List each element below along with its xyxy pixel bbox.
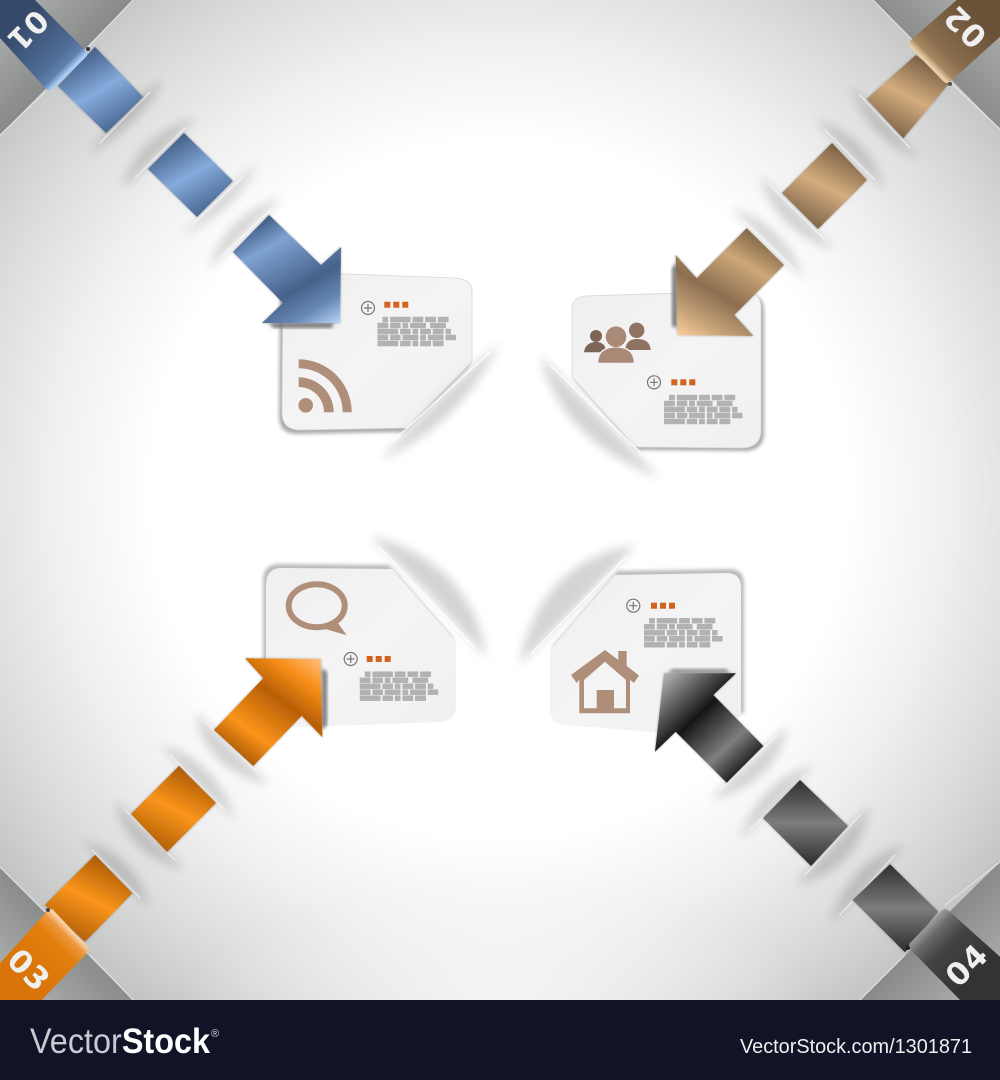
logo: registered mark: ® xyxy=(211,1028,219,1040)
ribbon segment xyxy=(131,766,216,852)
corner fold: bottom left xyxy=(0,867,133,1000)
orange markers xyxy=(367,656,391,662)
icon: speech bubble xyxy=(289,584,347,635)
card slits with shadows xyxy=(370,342,660,665)
icon: plus xyxy=(627,599,640,612)
ribbon segment xyxy=(853,864,938,952)
orange markers xyxy=(651,603,675,609)
ribbon 3: orange xyxy=(0,658,327,1000)
icon: plus xyxy=(344,652,357,666)
icon: plus xyxy=(362,302,374,314)
corner tag 03: 03 xyxy=(0,942,57,999)
image id: VectorStock.com/1301871 xyxy=(740,1036,972,1058)
panel: card 2 people xyxy=(572,291,764,451)
ribbon segment xyxy=(148,133,233,217)
arrow: dark xyxy=(655,669,763,783)
text block placeholder xyxy=(664,395,742,424)
corner fold: top left xyxy=(0,0,133,135)
logo: VectorStock: VectorStock xyxy=(30,1022,210,1061)
icon: plus xyxy=(648,376,660,389)
ribbon segment xyxy=(45,855,132,942)
corner fold: bottom right xyxy=(860,862,1000,1000)
ribbon segment xyxy=(58,47,143,133)
ribbon segment xyxy=(763,780,848,866)
arrow: blue xyxy=(233,215,341,328)
ribbon 1: blue xyxy=(0,0,341,328)
text block placeholder xyxy=(360,672,438,701)
panel: card 3 speech xyxy=(263,564,456,727)
ribbon 4: dark xyxy=(655,669,1000,1000)
icon: house xyxy=(571,650,639,713)
orange markers xyxy=(384,302,408,308)
ribbon slits: shadows and cuts xyxy=(82,80,920,925)
corner tag 01 xyxy=(0,0,90,90)
ribbon segment xyxy=(782,143,867,229)
text block placeholder xyxy=(378,317,456,346)
corner fold: top right xyxy=(873,0,1000,129)
corner tag 04: 04 xyxy=(939,937,996,994)
panel: card 4 home xyxy=(550,569,744,732)
ribbon 2: tan xyxy=(672,0,1000,336)
corner tag 02 xyxy=(909,0,1000,86)
icon: people xyxy=(584,323,651,364)
panel: card 1 RSS xyxy=(279,272,472,434)
footer bar xyxy=(0,1000,1000,1080)
text block placeholder xyxy=(644,618,722,647)
arrow: tan xyxy=(672,228,784,336)
icon: rss xyxy=(298,359,352,413)
corner tag 01: 01 xyxy=(0,2,55,58)
ribbon segment xyxy=(867,55,950,138)
orange markers xyxy=(671,379,695,385)
corner tag 04 xyxy=(906,909,1000,1000)
arrow: orange xyxy=(214,658,327,766)
corner tag 03 xyxy=(0,908,89,1000)
